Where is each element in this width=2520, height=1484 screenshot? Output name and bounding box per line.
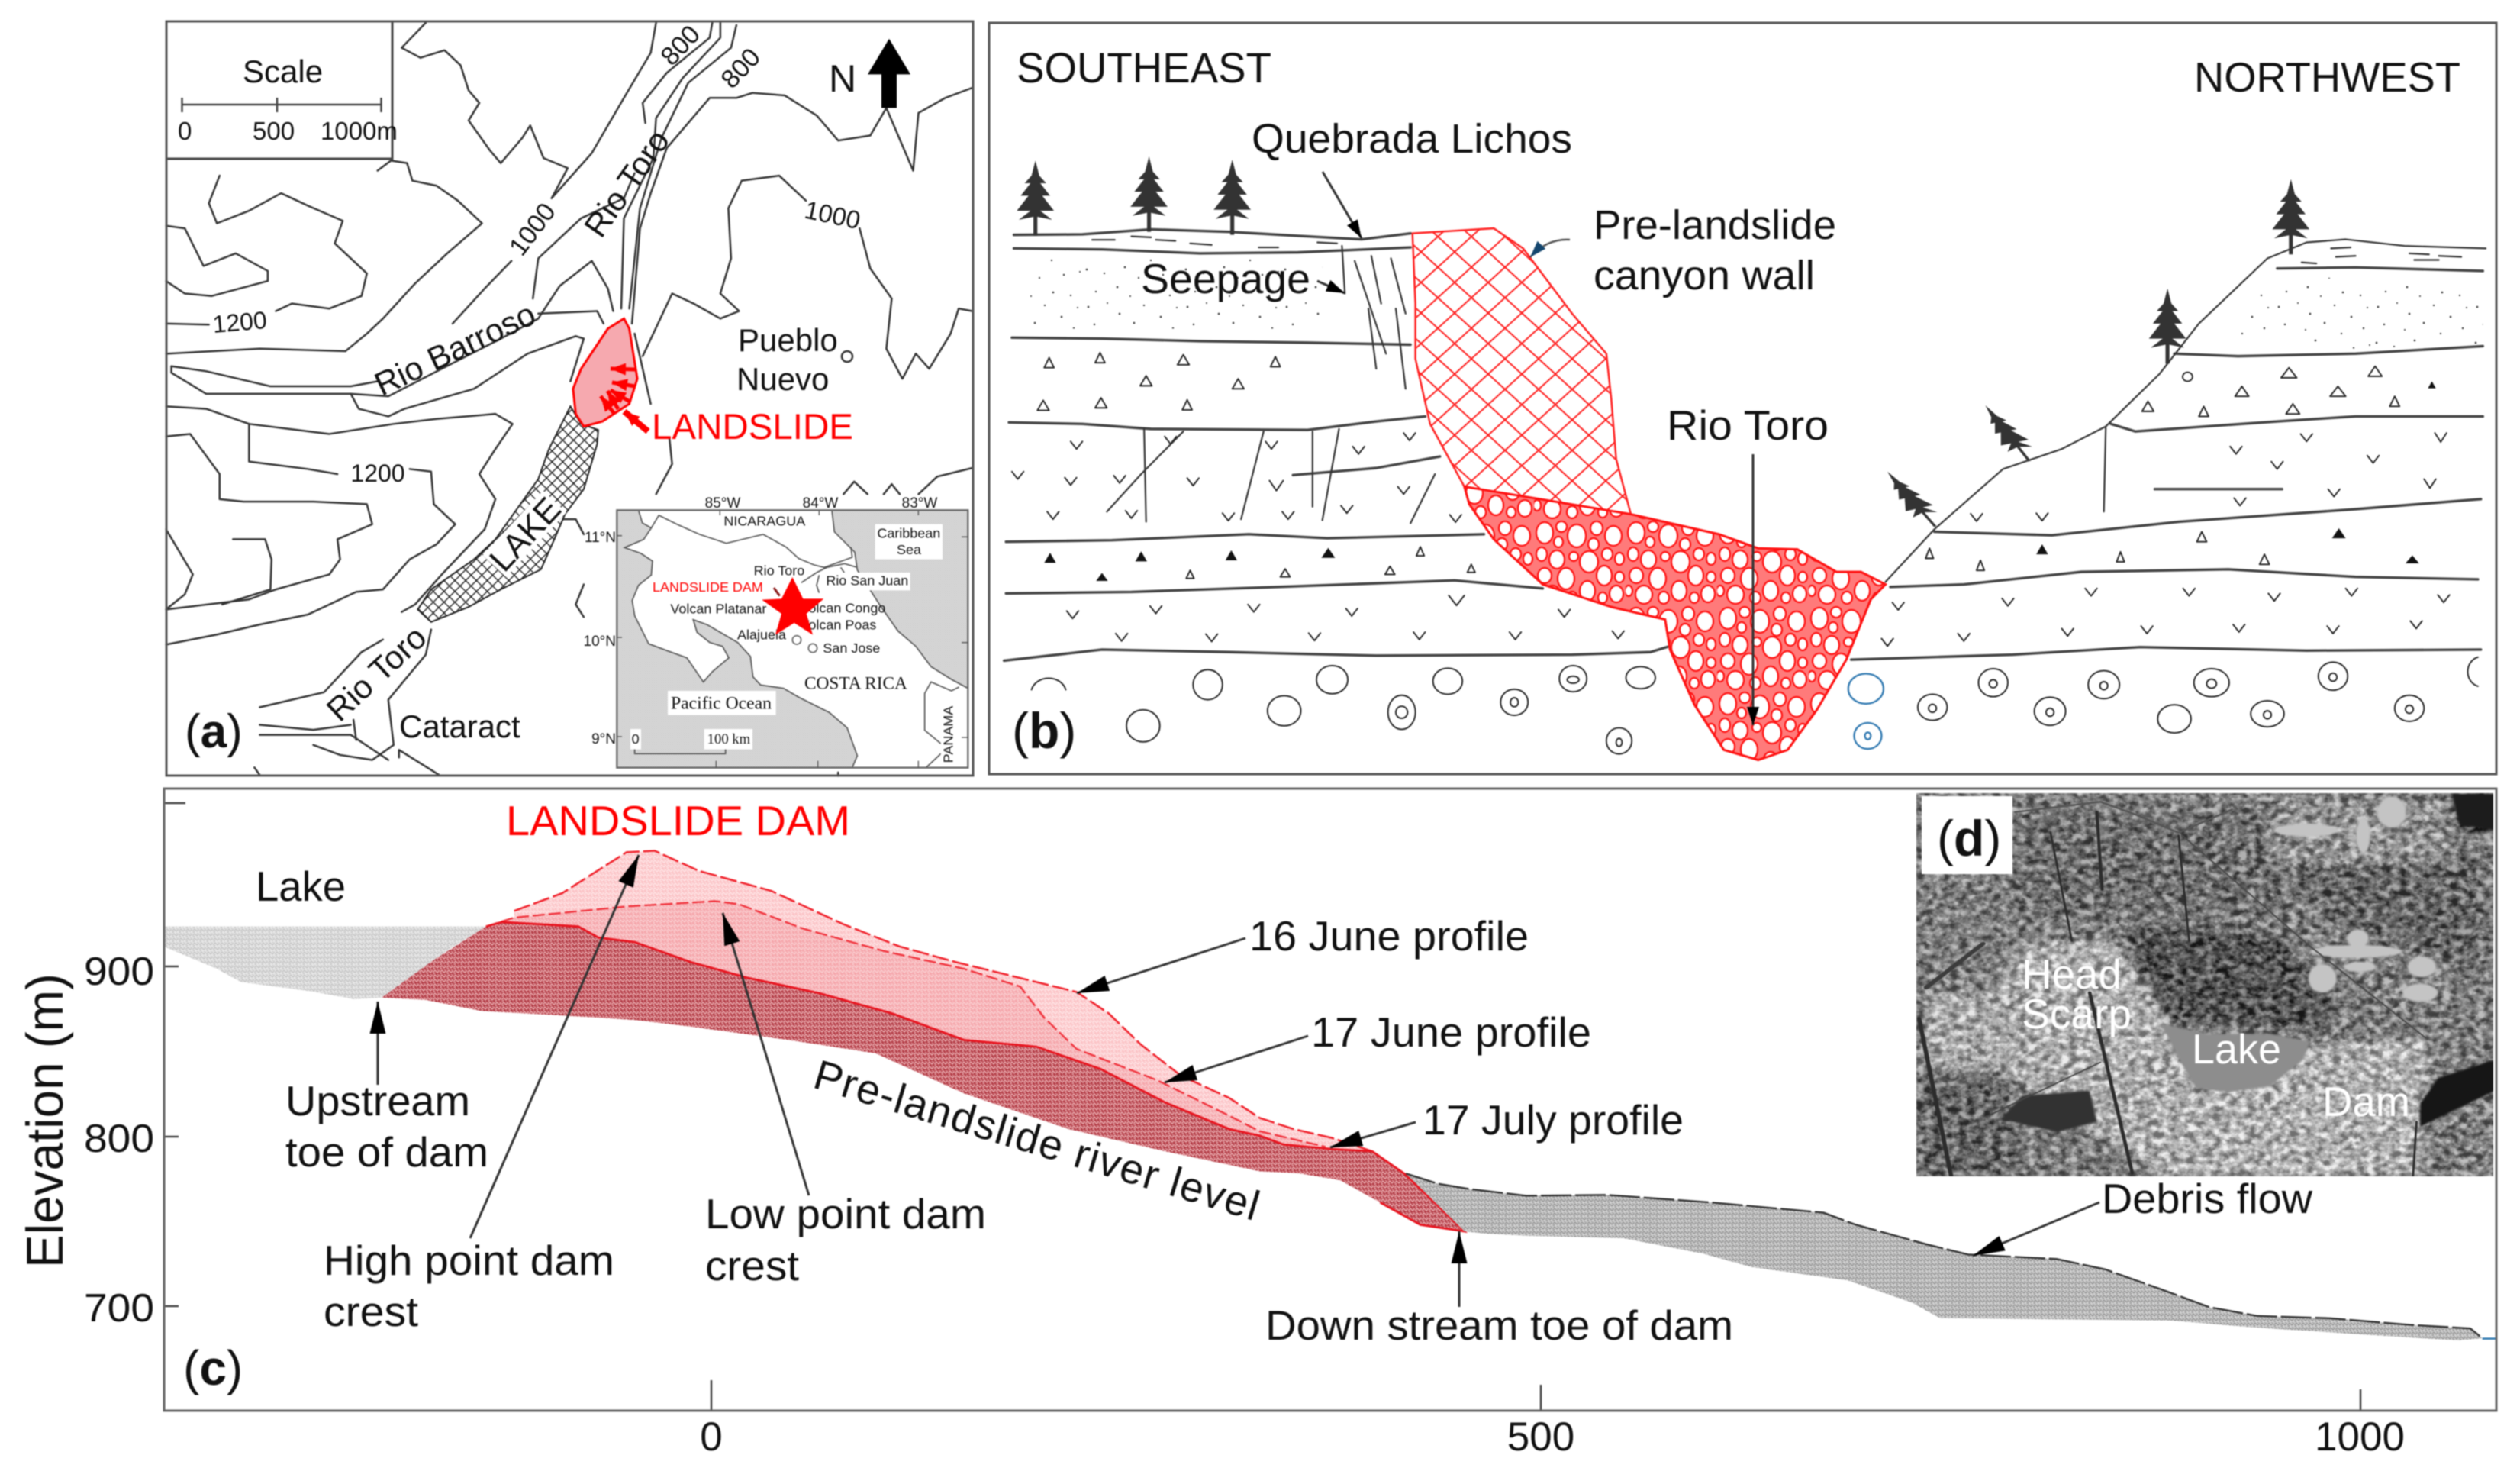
- lake hatched area: [417, 406, 598, 622]
- panel (a): location and contour map: [166, 20, 973, 776]
- inset serif labels: [671, 674, 907, 747]
- inset graticule labels: 9°N: [591, 731, 616, 747]
- strata lines: [1004, 229, 2483, 660]
- axis ticks: [164, 803, 2360, 1411]
- panel (b) labels: NORTHWEST: [2194, 53, 2460, 101]
- contour and river labels: 800: [655, 20, 706, 71]
- contour and river labels: Rio Barroso: [369, 295, 541, 403]
- inset place labels: 0: [632, 731, 640, 747]
- panel letter (a): (a): [185, 705, 243, 758]
- panel (c) annotations: Upstream: [285, 1077, 470, 1124]
- distance axis labels: 1000: [2315, 1415, 2405, 1460]
- lake area: [164, 927, 486, 999]
- inset graticule labels: 10°N: [584, 634, 616, 650]
- inset graticule labels: 11°N: [585, 530, 616, 546]
- panel letter (d): [1922, 796, 2012, 874]
- north arrow: N: [829, 57, 856, 100]
- panel (c) annotations: High point dam: [324, 1237, 614, 1284]
- boulder symbols: [1032, 657, 2478, 754]
- photograph of head scarp, lake and dam: [1916, 793, 2495, 1176]
- elevation axis labels: 700: [84, 1286, 154, 1331]
- elevation axis title: Elevation (m): [16, 973, 74, 1268]
- trees: [1017, 156, 2309, 530]
- distance axis labels: [700, 1415, 2405, 1460]
- triangle symbols: [1037, 353, 2399, 579]
- debris flow area: [1406, 1173, 2495, 1340]
- land area: [624, 510, 968, 768]
- Pueblo Nuevo town label: Nuevo: [736, 361, 829, 397]
- dark hollows: [2001, 794, 2495, 1132]
- branches and trunks: [1919, 802, 2427, 1176]
- north arrow: [829, 39, 910, 108]
- red gravel landslide dam: [1465, 486, 1886, 760]
- stippled layers: [1029, 259, 2483, 349]
- panel (c) annotations: Low point dam: [705, 1190, 986, 1237]
- inset place labels: Volcan Platanar: [670, 601, 766, 616]
- panel (d) photo labels: Lake: [2192, 1025, 2281, 1073]
- inset place labels: PANAMA: [940, 706, 955, 763]
- panel (b) labels: Quebrada Lichos: [1252, 116, 1572, 162]
- landslide movement arrows: [601, 369, 648, 431]
- panel (c) annotations: [256, 863, 2312, 1349]
- panel (c) annotations: 16 June profile: [1249, 912, 1529, 960]
- panel (c) annotations: Pre-landslide river level: [809, 1050, 1265, 1230]
- LANDSLIDE DAM label: LANDSLIDE DAM: [506, 797, 850, 844]
- Pueblo Nuevo town label: Pueblo: [738, 322, 838, 358]
- blue boulder symbols: [1848, 673, 1884, 749]
- panel (c) leader arrows: [378, 855, 2099, 1307]
- panel (a) frame: [166, 21, 973, 776]
- inset graticule labels: 83°W: [902, 495, 937, 511]
- panel (c) annotations: toe of dam: [285, 1128, 488, 1176]
- 17 June profile area: [486, 901, 1326, 1147]
- inset serif labels: Pacific Ocean: [671, 693, 772, 713]
- V symbols: [1012, 433, 2450, 646]
- 17 July profile and pre-landslide dark red area: [382, 922, 1465, 1231]
- inset map of Costa Rica: [617, 510, 968, 768]
- panel (d) photo labels: Head: [2022, 950, 2122, 998]
- topographic contour lines: [166, 23, 972, 776]
- inset place labels: Rio Toro: [754, 563, 804, 578]
- graticule ticks: [617, 510, 968, 768]
- borders and rivers: [651, 515, 959, 768]
- panel (b) labels: SOUTHEAST: [1017, 44, 1271, 92]
- inset graticule labels: 85°W: [705, 495, 740, 511]
- contour and river labels: Rio Toro: [577, 124, 677, 244]
- panel (b) labels: Rio Toro: [1667, 402, 1829, 449]
- panel (c) annotations: crest: [705, 1242, 799, 1289]
- inset place labels: Caribbean: [877, 525, 940, 540]
- LAKE label: LAKE: [482, 490, 569, 579]
- contour and river labels: 800: [715, 43, 766, 94]
- inset frame: [617, 510, 968, 768]
- contour and river labels: Cataract: [399, 708, 520, 744]
- Pueblo Nuevo town label: [736, 322, 852, 397]
- panel (b) labels: canyon wall: [1594, 253, 1815, 298]
- inset place labels: LANDSLIDE DAM: [653, 579, 763, 595]
- panel (c) annotations: crest: [324, 1288, 418, 1335]
- panel (d): field photograph: [1916, 793, 2495, 1176]
- panel (d) photo labels: Scarp: [2022, 990, 2132, 1037]
- inset scale bar: [635, 750, 726, 753]
- panel letter (c): (c): [183, 1340, 243, 1395]
- contour and river labels: 1000: [802, 195, 863, 234]
- scale box: 500: [253, 117, 295, 145]
- panel (d) photo labels: [2022, 950, 2410, 1125]
- stratigraphy and symbols: [1004, 229, 2486, 754]
- city markers: [792, 636, 817, 653]
- red star location marker: [762, 577, 823, 635]
- short dash symbols: [1092, 237, 2461, 263]
- lake water surface: [2161, 1024, 2310, 1092]
- elevation axis labels: 900: [84, 950, 154, 994]
- panel (b) labels: Pre-landslide: [1594, 202, 1836, 248]
- inset serif labels: 100 km: [707, 731, 751, 747]
- panel (c) annotations: 17 July profile: [1423, 1096, 1684, 1144]
- right valley slope: [1886, 240, 2486, 582]
- panel letter (d): (d): [1937, 810, 2001, 866]
- panel (b) arrows: [1317, 172, 1753, 725]
- scale box: [166, 21, 398, 159]
- panel (c) annotations: 17 June profile: [1311, 1008, 1591, 1056]
- panel (c): longitudinal elevation profile: [16, 789, 2496, 1460]
- elevation axis labels: 800: [84, 1117, 154, 1161]
- panel (c) frame: [164, 789, 2496, 1411]
- panel (b) frame: [989, 23, 2496, 774]
- pale leaves: [2274, 797, 2438, 1002]
- 16 June profile area: [514, 851, 1372, 1151]
- inset place labels: Alajuela: [737, 627, 786, 642]
- inset place labels: [632, 513, 955, 763]
- elevation axis labels: [84, 950, 154, 1331]
- panel (b) labels: Seepage: [1141, 255, 1310, 302]
- panel letter (b): (b): [1012, 702, 1076, 759]
- red hatched pre-landslide canyon wall: [1413, 228, 1631, 515]
- inset place labels: Rio San Juan: [826, 573, 908, 589]
- inset serif labels: COSTA RICA: [804, 674, 907, 694]
- scale box: 0: [178, 117, 192, 145]
- inset place labels: NICARAGUA: [723, 513, 805, 528]
- landslide dam tick: [774, 588, 780, 596]
- white text backings: [630, 524, 955, 763]
- inset place labels: San Jose: [823, 640, 880, 656]
- inset place labels: Volcan Poas: [800, 617, 876, 632]
- contour and river labels: Rio Toro: [320, 619, 433, 729]
- inset place labels: Sea: [897, 542, 921, 557]
- contour and river labels: 1000: [504, 198, 562, 261]
- panel (c) annotations: Lake: [256, 863, 346, 910]
- landslide red area: [573, 318, 637, 427]
- panel (b) labels: [1017, 44, 2460, 449]
- scale box: 1000m: [321, 117, 398, 145]
- contour and river labels: 1200: [211, 306, 268, 338]
- inset graticule labels: 84°W: [803, 495, 838, 511]
- distance axis labels: 0: [700, 1415, 723, 1460]
- inset place labels: Volcan Congo: [800, 601, 885, 616]
- contour and river labels: 1200: [350, 460, 405, 487]
- distance axis labels: 500: [1507, 1415, 1574, 1460]
- sea background: [617, 510, 968, 768]
- panel (d) photo labels: Dam: [2322, 1078, 2410, 1125]
- scale box: Scale: [243, 53, 323, 89]
- panel (c) annotations: Down stream toe of dam: [1265, 1302, 1733, 1349]
- panel (c) annotations: Debris flow: [2102, 1175, 2312, 1222]
- faults and seepage joints: [1107, 246, 2106, 523]
- inset graticule labels: [584, 495, 937, 747]
- contour and river labels: [211, 20, 863, 744]
- LANDSLIDE label: LANDSLIDE: [652, 406, 853, 447]
- panel (b): geological cross-section: [989, 23, 2496, 774]
